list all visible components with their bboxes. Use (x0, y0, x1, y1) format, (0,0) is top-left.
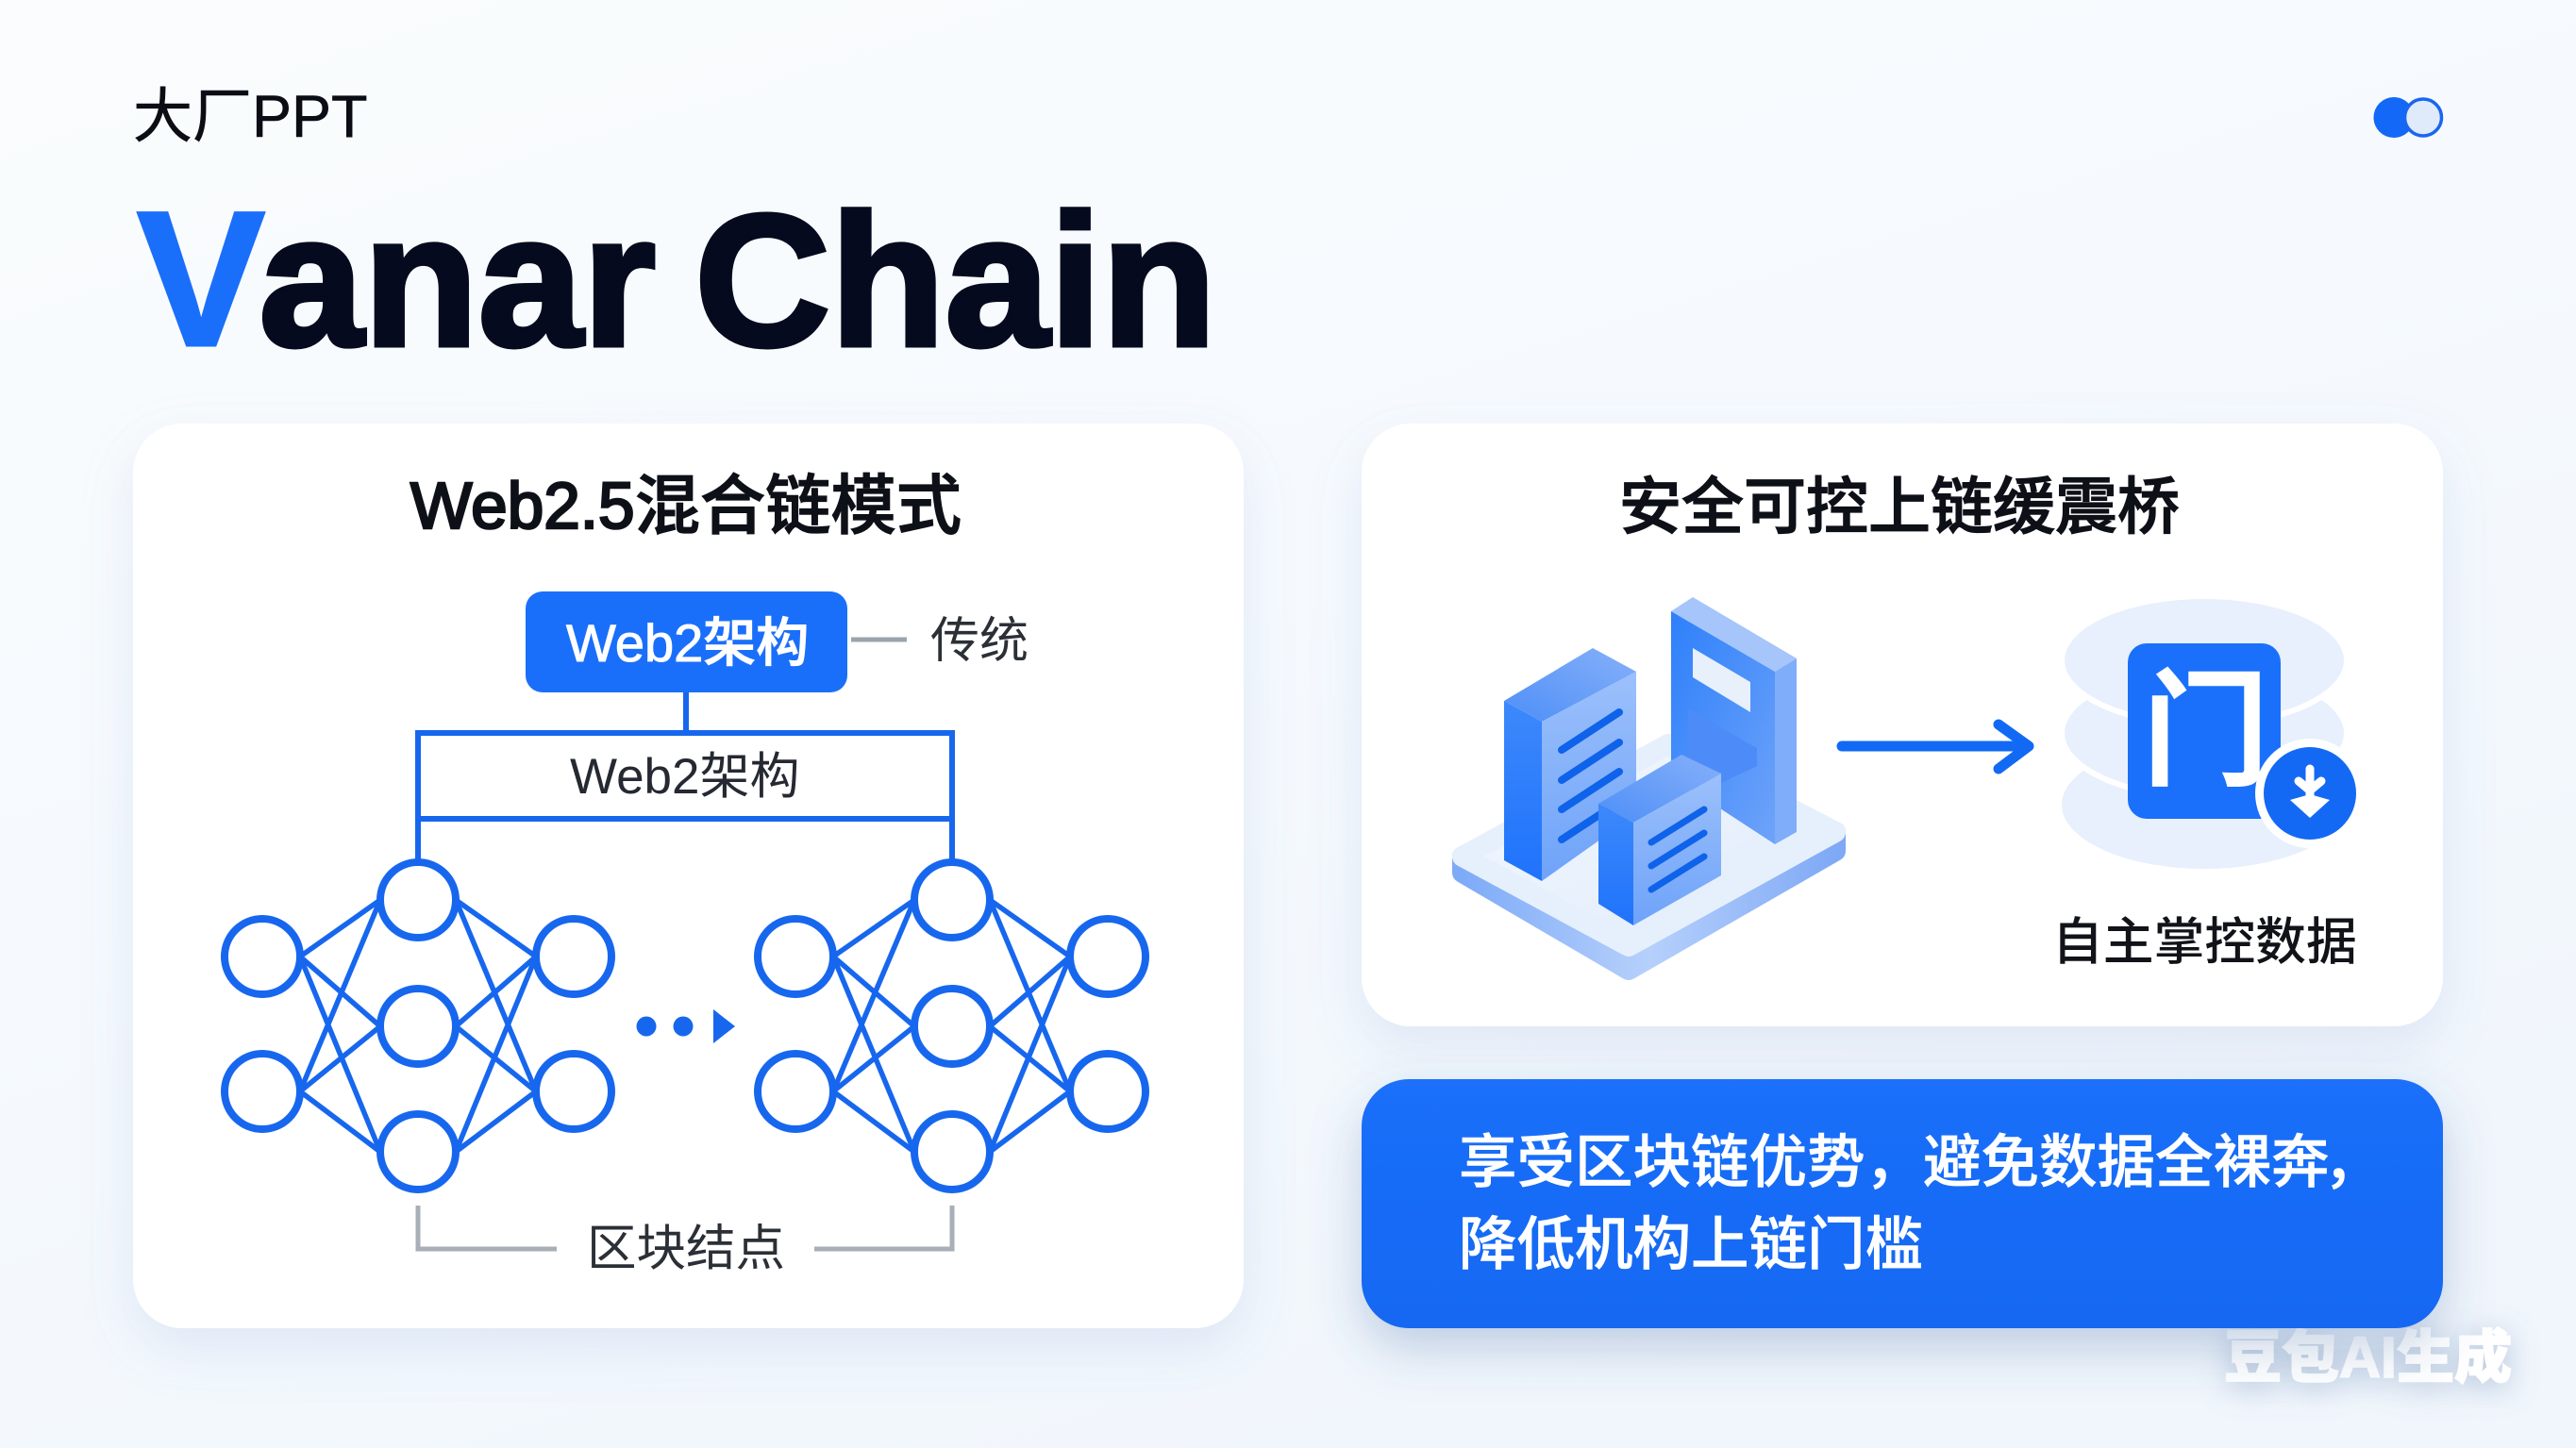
icon: data stack with door and download badge (2062, 596, 2365, 869)
icon: toggle circles (2374, 97, 2442, 138)
arrow (1842, 724, 2029, 769)
ellipsis arrow (636, 1009, 735, 1043)
main title: Vanar Chain (137, 172, 1216, 387)
block node bracket and label (418, 1206, 952, 1276)
traditional label: 传统 (930, 614, 1029, 669)
left node network (225, 862, 611, 1190)
architecture box: Web2架构 (570, 749, 800, 805)
icon: data stack with door and download badge: 门 (2142, 660, 2269, 803)
panel: Web2.5 hybrid chain (133, 424, 1244, 1328)
data control label: 自主掌控数据 (2052, 914, 2357, 971)
icon: isometric buildings (1463, 597, 1835, 970)
panel heading: 安全可控上链缓震桥 (1619, 472, 2180, 541)
callout: blue summary card: 享受区块链优势，避免数据全裸奔， (1459, 1130, 2382, 1195)
Web2 button: Web2架构 (566, 613, 809, 673)
watermark: 豆包AI生成 (2224, 1325, 2512, 1390)
callout: blue summary card: 降低机构上链门槛 (1459, 1212, 1923, 1277)
panel heading: Web2.5混合链模式 (410, 469, 962, 542)
block node bracket and label: 区块结点 (587, 1221, 785, 1276)
Web2 button (526, 591, 847, 692)
subtitle: 大厂PPT (133, 84, 368, 150)
panel: secure bridge (1362, 424, 2443, 1026)
right node network (758, 862, 1146, 1190)
callout: blue summary card (1362, 1079, 2443, 1328)
architecture box (418, 692, 952, 863)
